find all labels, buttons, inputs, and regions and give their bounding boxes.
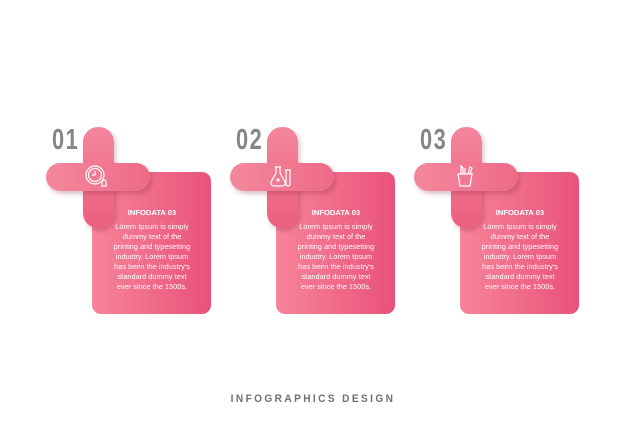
cross vertical 02 <box>267 127 298 228</box>
cross horizontal 02 <box>230 163 334 191</box>
panel: step 02 <box>230 124 395 314</box>
number 01: 01 <box>52 124 79 156</box>
text card 03 <box>460 172 579 314</box>
text card 02 <box>276 172 395 314</box>
text block 02: Lorem Ipsum is simply dummy text of the printing and typesetting industry. Lorem Ipsum has been the industry's standard dummy text ever since the 1500s. <box>298 222 374 291</box>
icon: flask <box>270 166 291 187</box>
text block 01: INFODATA 03 <box>128 208 176 217</box>
text card 01 <box>92 172 211 314</box>
icon: pencil cup <box>457 164 473 187</box>
text block 01: Lorem Ipsum is simply dummy text of the printing and typesetting industry. Lorem Ipsum has been the industry's standard dummy text ever since the 1500s. <box>114 222 190 291</box>
cross horizontal 01 <box>46 163 150 191</box>
icon: clock bell <box>85 165 107 187</box>
text block 02: INFODATA 03 <box>312 208 360 217</box>
number 03: 03 <box>420 124 447 156</box>
number 02: 02 <box>236 124 263 156</box>
footer title: INFOGRAPHICS DESIGN <box>231 393 395 405</box>
panel: step 03 <box>414 124 579 314</box>
text block 03: INFODATA 03 <box>496 208 544 217</box>
text block 03: Lorem Ipsum is simply dummy text of the printing and typesetting industry. Lorem Ipsum has been the industry's standard dummy text ever since the 1500s. <box>482 222 558 291</box>
cross vertical 01 <box>83 127 114 228</box>
cross horizontal 03 <box>414 163 518 191</box>
cross vertical 03 <box>451 127 482 228</box>
